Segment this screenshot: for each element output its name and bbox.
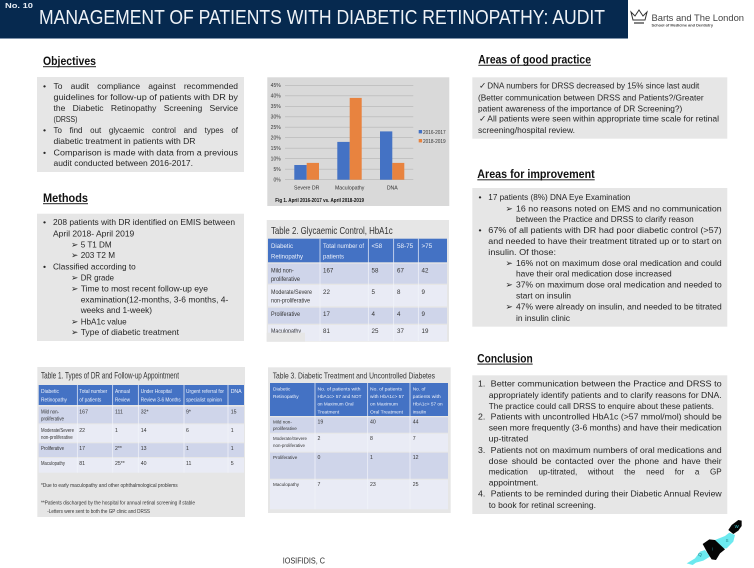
table 1: types of DR and follow-up appointment: Proliferative	[41, 446, 64, 452]
table 1: types of DR and follow-up appointment: 111	[115, 410, 123, 416]
panel: methods: HbA1c value	[81, 317, 127, 327]
table 3: diabetic treatment and uncontrolled diabetes: with HbA1c> 57	[370, 394, 404, 400]
table 1: types of DR and follow-up appointment: 1	[231, 428, 234, 434]
panel: objectives: To audit compliance against recommended	[54, 81, 238, 91]
header banner	[0, 0, 754, 39]
table 1: types of DR and follow-up appointment: Moderate/Severe	[41, 428, 74, 434]
table 2: glycaemic control: 4	[372, 311, 376, 318]
table 3: diabetic treatment and uncontrolled diabetes: Proliferative	[273, 455, 298, 460]
category labels	[294, 185, 398, 191]
table 3 title: Table 3. Diabetic Treatment and Uncontrolled Diabetes	[273, 370, 435, 380]
category labels: Severe DR	[294, 185, 320, 191]
table 3: diabetic treatment and uncontrolled diabetes: patients with	[413, 394, 441, 400]
panel: areas for improvement: start on insulin	[516, 291, 571, 301]
panel: areas for improvement: 47% were already on insulin, and needed to be titrated	[516, 302, 722, 312]
table 2: glycaemic control: 5	[372, 289, 376, 296]
table 1 footnotes: -Letters were sent to both the GP clinic and DRSS	[47, 509, 150, 515]
table 1: types of DR and follow-up appointment: 6	[186, 428, 189, 434]
panel: objectives: •	[43, 125, 46, 135]
panel: areas for improvement: ➢	[506, 258, 513, 268]
table 1: types of DR and follow-up appointment: 11	[186, 461, 191, 467]
table 3: diabetic treatment and uncontrolled diabetes: 12	[413, 455, 419, 461]
table 1: types of DR and follow-up appointment: 14	[141, 428, 147, 434]
table 1: types of DR and follow-up appointment: 2**	[115, 446, 122, 452]
panel: methods: 208 patients with DR identified on EMIS between	[53, 217, 235, 227]
panel: methods: April 2018- April 2019	[53, 228, 134, 238]
panel: areas for improvement: insulin. Of those:	[488, 247, 556, 257]
panel: areas of good practice: ✓	[479, 114, 486, 124]
panel: objectives: •	[43, 81, 46, 91]
heading: Methods: Methods	[43, 191, 88, 205]
panel: areas for improvement: 16 no reasons noted on EMS and no communication	[516, 203, 722, 213]
table 2: glycaemic control	[267, 220, 449, 342]
panel: methods: ➢	[71, 327, 78, 337]
table 3: diabetic treatment and uncontrolled diabetes: Diabetic	[273, 386, 291, 392]
panel: areas for improvement: 37% on maximum dose oral medication and needed to	[516, 280, 722, 290]
panel: areas for improvement: 16% not on maximum dose oral medication and could	[516, 258, 722, 268]
panel: methods: ➢	[71, 283, 78, 293]
y axis labels	[271, 83, 281, 184]
heading: Areas for improvement: Areas for improvement	[477, 167, 595, 181]
logo: Barts and The London: School of Medicine and Dentistry	[652, 24, 713, 28]
table 2: glycaemic control: 17	[323, 311, 330, 318]
panel: areas for improvement: in insulin clinic	[516, 313, 571, 323]
panel: areas of good practice: screening/hospital review.	[478, 125, 575, 135]
panel: conclusion: Patients to be reminded during their Diabetic Annual Review	[491, 488, 722, 498]
heading: Conclusion: Conclusion	[477, 351, 533, 365]
table 3: diabetic treatment and uncontrolled diabetes: 1	[370, 455, 373, 461]
panel: areas for improvement: and needed to have their treatment titrated up or to start on	[488, 236, 722, 246]
table 3: diabetic treatment and uncontrolled diabetes: No. of patients with	[318, 386, 361, 392]
table 2: glycaemic control: 81	[323, 328, 330, 335]
table 2: glycaemic control: Retinopathy	[271, 254, 304, 260]
table 3: diabetic treatment and uncontrolled diabetes: 23	[370, 482, 376, 488]
table 1: types of DR and follow-up appointment: Retinopathy	[41, 398, 67, 404]
table 3: diabetic treatment and uncontrolled diabetes: 44	[413, 420, 419, 426]
table 3: diabetic treatment and uncontrolled diabetes: No. of	[413, 386, 426, 392]
table 3: diabetic treatment and uncontrolled diabetes: Mild non-	[273, 420, 292, 424]
table 2: glycaemic control: 67	[397, 267, 404, 274]
table 2: glycaemic control: 37	[397, 328, 404, 335]
table 3: diabetic treatment and uncontrolled diabetes: Oral Treatment	[370, 410, 404, 416]
heading: Areas of good practice: Areas of good practice	[478, 52, 591, 66]
y axis labels: 40%	[271, 94, 281, 100]
panel: conclusion: 3.	[478, 445, 485, 455]
bars	[294, 98, 404, 180]
table 3: diabetic treatment and uncontrolled diabetes: 0	[318, 455, 320, 461]
table 1 footnotes: *Due to early maculopathy and other ophthalmological problems	[41, 483, 178, 489]
category labels: DNA	[387, 185, 398, 191]
table 2: glycaemic control: 22	[323, 289, 330, 296]
table 3: diabetic treatment and uncontrolled diabetes: Retinopathy	[273, 394, 299, 400]
panel: conclusion: The practice could call DRSS to enquire about these patients.	[489, 401, 714, 411]
table 2: glycaemic control: Total number of	[323, 243, 364, 250]
panel: areas for improvement: ➢	[506, 203, 513, 213]
panel: methods: ➢	[71, 317, 78, 327]
panel: areas of good practice	[472, 77, 727, 139]
panel: objectives	[37, 77, 244, 172]
panel: methods: 5 T1 DM	[81, 239, 112, 249]
table 2: glycaemic control: proliferative	[271, 276, 301, 283]
table 1: types of DR and follow-up appointment: Review 3-6 Months	[141, 398, 181, 404]
author: IOSIFIDIS, C	[283, 555, 325, 565]
panel: conclusion: 4.	[478, 488, 485, 498]
table 1: types of DR and follow-up appointment: 13	[141, 446, 147, 452]
table 1: types of DR and follow-up appointment: 81	[79, 461, 85, 467]
table 1: types of DR and follow-up appointment: Mild non-	[41, 410, 59, 416]
table 1: types of DR and follow-up appointment: specialist opinion	[186, 398, 222, 404]
icon: islands map: Q	[698, 552, 702, 558]
table 1: types of DR and follow-up appointment: 32*	[141, 410, 148, 416]
table 2: glycaemic control: Maculopathy	[271, 328, 302, 335]
panel: objectives: audit conducted between 2016-2017.	[54, 158, 193, 168]
table 3: diabetic treatment and uncontrolled diabetes: 7	[413, 436, 416, 442]
icon: islands map: I	[712, 547, 713, 552]
panel: conclusion: Better communication between the Practice and DRSS to	[491, 379, 722, 389]
y axis labels: 0%	[273, 178, 281, 184]
table 3: diabetic treatment and uncontrolled diabetes: 7	[318, 482, 320, 488]
panel: areas for improvement: 17 patients (8%) DNA Eye Examination	[488, 192, 630, 202]
table 1: types of DR and follow-up appointment: Urgent referral for	[186, 389, 224, 395]
panel: methods: •	[43, 262, 46, 272]
table 2: glycaemic control: 58	[372, 267, 379, 274]
table 1: types of DR and follow-up appointment: proliferative	[41, 416, 64, 422]
table 2: glycaemic control: 58-75	[397, 243, 414, 250]
table 3: diabetic treatment and uncontrolled diabetes: insulin	[413, 410, 427, 416]
table 1: types of DR and follow-up appointment: 5	[231, 461, 234, 467]
table 3: diabetic treatment and uncontrolled diabetes: 2	[318, 436, 320, 442]
table 1: types of DR and follow-up appointment: non-proliferative	[41, 435, 73, 441]
table 1: types of DR and follow-up appointment: of patients	[79, 398, 102, 404]
table 2: glycaemic control: 4	[397, 311, 401, 318]
panel: areas for improvement: 67% of all patients with DR had poor diabetic control (>57)	[488, 225, 722, 235]
panel: methods: Time to most recent follow-up eye	[81, 283, 208, 293]
panel: methods: weeks and 1-week)	[80, 305, 152, 315]
panel: conclusion: seen more frequently (3-6 months) and have their medication	[489, 423, 722, 433]
panel: conclusion: to book for retinal screening.	[489, 500, 596, 510]
table 3: diabetic treatment and uncontrolled diabetes: 40	[370, 420, 376, 426]
table 1: types of DR and follow-up appointment: 1	[186, 446, 189, 452]
table 3: diabetic treatment and uncontrolled diabetes: proliferative	[273, 426, 297, 431]
table 2: glycaemic control: 25	[372, 328, 379, 335]
panel: areas of good practice: ✓	[479, 81, 486, 91]
panel: methods: examination(12-months, 3-6 months, 4-	[81, 294, 228, 304]
table 2: glycaemic control: Diabetic	[271, 243, 293, 250]
table 3: diabetic treatment and uncontrolled diabetes: Maculopathy	[273, 482, 300, 487]
panel: areas for improvement	[472, 188, 727, 327]
panel: conclusion: appropriately identify patients and to clarify reasons for DNA.	[489, 390, 722, 400]
panel: conclusion: up-titrated	[489, 434, 528, 444]
panel: methods: DR grade	[81, 272, 114, 282]
panel: objectives: To find out glycaemic control and types of	[54, 125, 239, 135]
table 1 title: Table 1. Types of DR and Follow-up Appointment	[41, 370, 179, 380]
table 1: types of DR and follow-up appointment: DNA	[231, 389, 242, 395]
table 2: glycaemic control: Mild non-	[271, 267, 294, 274]
table 3: diabetic treatment and uncontrolled diabetes: HbA1c> 57 and NOT	[318, 394, 362, 400]
panel: conclusion: medication up-titrated, without the need for a GP	[489, 467, 722, 477]
legend: 2018-2019	[423, 139, 446, 145]
panel: areas for improvement: ➢	[506, 280, 513, 290]
panel: methods: ➢	[71, 250, 78, 260]
heading: Objectives: Objectives	[43, 54, 96, 68]
table 3: diabetic treatment and uncontrolled diabetes: non-proliferative	[273, 443, 305, 448]
panel: methods: 203 T2 M	[81, 250, 115, 260]
table 1: types of DR and follow-up appointment: Annual	[115, 389, 130, 395]
panel: objectives: Comparison is made with data from a previous	[54, 148, 239, 158]
table 1: types of DR and follow-up appointment: 1	[231, 446, 234, 452]
table 3: diabetic treatment and uncontrolled diabetes: 19	[318, 420, 323, 426]
panel: conclusion: dose should be contacted over the phone and have their	[489, 456, 722, 466]
table 1: types of DR and follow-up appointment: Total number	[79, 389, 108, 395]
table 1: types of DR and follow-up appointment: 9*	[186, 410, 191, 416]
panel: conclusion: Patients not on maximum numbers of oral medications and	[491, 445, 722, 455]
table 1: types of DR and follow-up appointment: 1	[115, 428, 118, 434]
table 1 footnotes	[41, 483, 195, 515]
legend: 2016-2017	[423, 130, 446, 136]
table 2: glycaemic control: <58	[372, 243, 383, 250]
y axis labels: 35%	[271, 104, 281, 110]
table 1: types of DR and follow-up appointment: 167	[79, 410, 88, 416]
table 3: diabetic treatment and uncontrolled diabetes: HbA1c> 57 on	[413, 402, 443, 408]
table 2: glycaemic control: Proliferative	[271, 311, 300, 318]
table 2: glycaemic control: 42	[422, 267, 429, 274]
y axis labels: 30%	[271, 114, 281, 120]
chart caption: Fig 1. April 2016-2017 vs. April 2018-2019	[275, 198, 364, 204]
table 1: types of DR and follow-up appointment: 22	[79, 428, 85, 434]
table 1: types of DR and follow-up appointment: Maculopathy	[41, 461, 65, 467]
table 3: diabetic treatment and uncontrolled diabetes: on Maximum	[370, 402, 398, 408]
legend	[419, 130, 446, 145]
panel: methods: Type of diabetic treatment	[81, 327, 180, 337]
table 3: diabetic treatment and uncontrolled diabetes: 8	[370, 436, 373, 442]
y axis labels: 25%	[271, 125, 281, 131]
y axis labels: 45%	[271, 83, 281, 89]
panel: areas of good practice: (Better communication between DRSS and Patients?/Greater	[478, 92, 704, 102]
table 1: types of DR and follow-up appointment: 25**	[115, 461, 125, 467]
table 1 footnotes: **Patients discharged by the hospital for annual retinal screening if stable	[41, 500, 195, 506]
table 3: diabetic treatment and uncontrolled diabetes: 25	[413, 482, 419, 488]
table 2: glycaemic control: >75	[422, 243, 433, 250]
panel: conclusion: appointment.	[489, 478, 538, 488]
table 2: glycaemic control: patients	[323, 254, 344, 260]
table 2: glycaemic control: 9	[422, 289, 426, 296]
table 1: types of DR and follow-up appointment: 40	[141, 461, 147, 467]
table 1: types of DR and follow-up appointment: 17	[79, 446, 85, 452]
y axis labels: 10%	[271, 156, 281, 162]
panel: areas of good practice: patient awareness of the importance of DR Screening?)	[478, 103, 682, 113]
bar chart: fig 1	[267, 77, 449, 206]
panel: methods: •	[43, 217, 46, 227]
panel: conclusion: Patients with uncontrolled HbA1c (>57 mmol/mol) should be	[491, 412, 722, 422]
panel: areas for improvement: between the Practice and DRSS to clarify reason	[516, 214, 694, 224]
panel: methods: Classified according to	[53, 262, 136, 272]
panel: methods: ➢	[71, 239, 78, 249]
y axis labels: 5%	[273, 167, 281, 173]
icon: islands map: S	[726, 538, 729, 543]
table 1: types of DR and follow-up appointment: Diabetic	[41, 389, 59, 395]
y axis labels: 20%	[271, 136, 281, 142]
logo: Barts and The London	[628, 0, 754, 39]
table 2 title: Table 2. Glycaemic Control, HbA1c	[271, 225, 393, 237]
table 2: glycaemic control: 9	[422, 311, 426, 318]
table 1: types of DR and follow-up appointment: 15	[231, 410, 237, 416]
table 3: diabetic treatment and uncontrolled diabetes: No. of patients	[370, 386, 403, 392]
category labels: Maculopathy	[335, 185, 365, 191]
panel: areas of good practice: All patients were seen within appropriate time scale for retinal	[487, 114, 719, 124]
table 1: types of DR and follow-up appointment	[37, 367, 245, 517]
table 3: diabetic treatment and uncontrolled diabetes: Moderate/Severe	[273, 436, 307, 441]
table 3: diabetic treatment and uncontrolled diabetes: Treatment	[318, 410, 340, 416]
table 1: types of DR and follow-up appointment: Review	[115, 398, 130, 404]
table 3: diabetic treatment and uncontrolled diabetes	[268, 367, 451, 513]
title: MANAGEMENT OF PATIENTS WITH DIABETIC RETINOPATHY: AUDIT	[39, 7, 605, 29]
panel: objectives: the Diabetic Retinopathy Screening Service	[54, 103, 238, 113]
panel: conclusion: 2.	[478, 412, 485, 422]
panel: areas for improvement: have their oral medication dose increased	[516, 269, 672, 279]
table 2: glycaemic control: non-proliferative	[271, 298, 310, 305]
panel: areas for improvement: •	[478, 192, 482, 202]
panel: areas of good practice: DNA numbers for DRSS decreased by 15% since last audit	[487, 81, 700, 91]
logo: Barts and The London: Barts and The London	[652, 12, 744, 23]
icon: islands map: W	[735, 524, 740, 529]
table 2: glycaemic control: 19	[422, 328, 429, 335]
table 1: types of DR and follow-up appointment: Under Hospital	[141, 389, 172, 395]
table 2: glycaemic control: Moderate/Severe	[271, 289, 312, 296]
panel: conclusion	[472, 375, 727, 514]
panel: conclusion: 1.	[478, 379, 485, 389]
panel: areas for improvement: •	[478, 225, 482, 235]
panel: methods: ➢	[71, 272, 78, 282]
icon: islands map	[687, 520, 742, 565]
table 2: glycaemic control: 8	[397, 289, 401, 296]
panel: objectives: •	[43, 148, 46, 158]
y axis labels: 15%	[271, 146, 281, 152]
panel: objectives: guidelines for follow-up of patients with DR by	[54, 92, 239, 102]
table 3: diabetic treatment and uncontrolled diabetes: on Maximum Oral	[318, 402, 354, 408]
table 2: glycaemic control: 167	[323, 267, 334, 274]
panel: areas for improvement: ➢	[506, 302, 513, 312]
panel: objectives: diabetic treatment in patients with DR	[54, 136, 196, 146]
poster number: No. 10	[5, 1, 33, 10]
panel: objectives: (DRSS)	[54, 114, 78, 124]
panel: methods	[37, 214, 244, 341]
